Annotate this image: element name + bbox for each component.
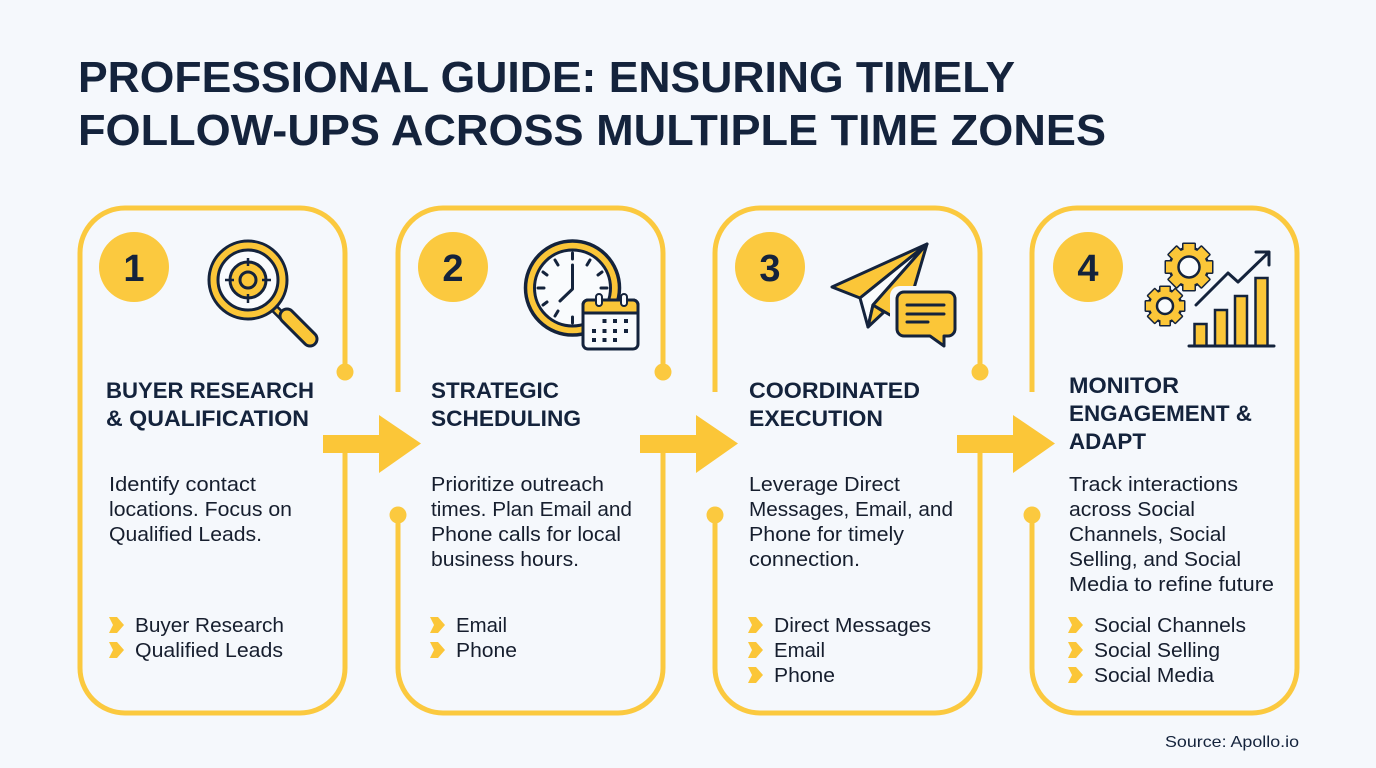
heading: ENGAGEMENT & [1069, 401, 1252, 426]
bullet list [430, 615, 517, 662]
body text [109, 474, 292, 546]
heading: MONITOR [1069, 373, 1179, 398]
body text: Media to refine future [1069, 574, 1274, 596]
panel 2 outline [390, 208, 672, 713]
small gear [1146, 287, 1184, 325]
heading: SCHEDULING [431, 406, 581, 431]
heading: BUYER RESEARCH [106, 378, 314, 403]
heading: COORDINATED [749, 378, 920, 403]
body text: Messages, Email, and [749, 499, 953, 521]
heading: & QUALIFICATION [106, 406, 309, 431]
body text [1069, 474, 1274, 596]
step number 1: 1 [123, 248, 145, 290]
bullet list: Social Selling [1094, 640, 1220, 662]
body text: connection. [749, 549, 860, 571]
bullet list: Buyer Research [135, 615, 284, 637]
panel 3 outline [706, 208, 988, 713]
step number 1 [99, 232, 169, 302]
title: PROFESSIONAL GUIDE: ENSURING TIMELY [78, 53, 1015, 102]
panel 4 outline [1024, 208, 1297, 713]
bullet list: Phone [774, 665, 835, 687]
step number 2 [418, 232, 488, 302]
bullet list [109, 615, 284, 662]
heading [106, 378, 314, 431]
arrow: step 1 to 2 [323, 415, 421, 473]
heading: STRATEGIC [431, 378, 559, 403]
body text: across Social [1069, 499, 1195, 521]
step number 2: 2 [442, 248, 464, 290]
body text: Leverage Direct [749, 474, 900, 496]
title [78, 53, 1106, 155]
icon: gears and growth chart [1146, 244, 1274, 346]
bullet list: Social Media [1094, 665, 1215, 687]
body text: Prioritize outreach [431, 474, 604, 496]
arrow: step 2 to 3 [640, 415, 738, 473]
step number 3: 3 [759, 248, 781, 290]
panel: step 2 strategic scheduling [390, 208, 672, 713]
bullet list: Qualified Leads [135, 640, 283, 662]
body text: Phone for timely [749, 524, 904, 546]
icon: magnifying glass with target [209, 241, 310, 339]
bullet list: Phone [456, 640, 517, 662]
body text: business hours. [431, 549, 579, 571]
body text: locations. Focus on [109, 499, 292, 521]
heading [431, 378, 581, 431]
bullet list: Direct Messages [774, 615, 931, 637]
source note: Source: Apollo.io [1165, 734, 1299, 751]
heading: ADAPT [1069, 429, 1146, 454]
large gear [1166, 244, 1212, 290]
panel: step 3 coordinated execution [706, 208, 988, 713]
body text [431, 474, 632, 571]
arrow: step 3 to 4 [957, 415, 1055, 473]
body text: Phone calls for local [431, 524, 621, 546]
body text: Qualified Leads. [109, 524, 262, 546]
panel: step 1 buyer research [80, 208, 354, 713]
icon: paper plane and chat bubble [832, 244, 962, 346]
body text: times. Plan Email and [431, 499, 632, 521]
panel: step 4 monitor engagement [1024, 208, 1297, 713]
bullet list: Social Channels [1094, 615, 1246, 637]
body text: Selling, and Social [1069, 549, 1241, 571]
heading: EXECUTION [749, 406, 883, 431]
body text: Channels, Social [1069, 524, 1226, 546]
step number 4 [1053, 232, 1123, 302]
title: FOLLOW-UPS ACROSS MULTIPLE TIME ZONES [78, 106, 1106, 155]
bullet list [748, 615, 931, 687]
heading [1069, 373, 1252, 454]
bullet list: Email [774, 640, 825, 662]
step number 3 [735, 232, 805, 302]
body text: Identify contact [109, 474, 256, 496]
icon: clock and calendar [526, 241, 638, 349]
heading [749, 378, 920, 431]
body text [749, 474, 953, 571]
bullet list: Email [456, 615, 507, 637]
body text: Track interactions [1069, 474, 1238, 496]
step number 4: 4 [1077, 248, 1099, 290]
panel 1 outline [80, 208, 354, 713]
bullet list [1068, 615, 1246, 687]
